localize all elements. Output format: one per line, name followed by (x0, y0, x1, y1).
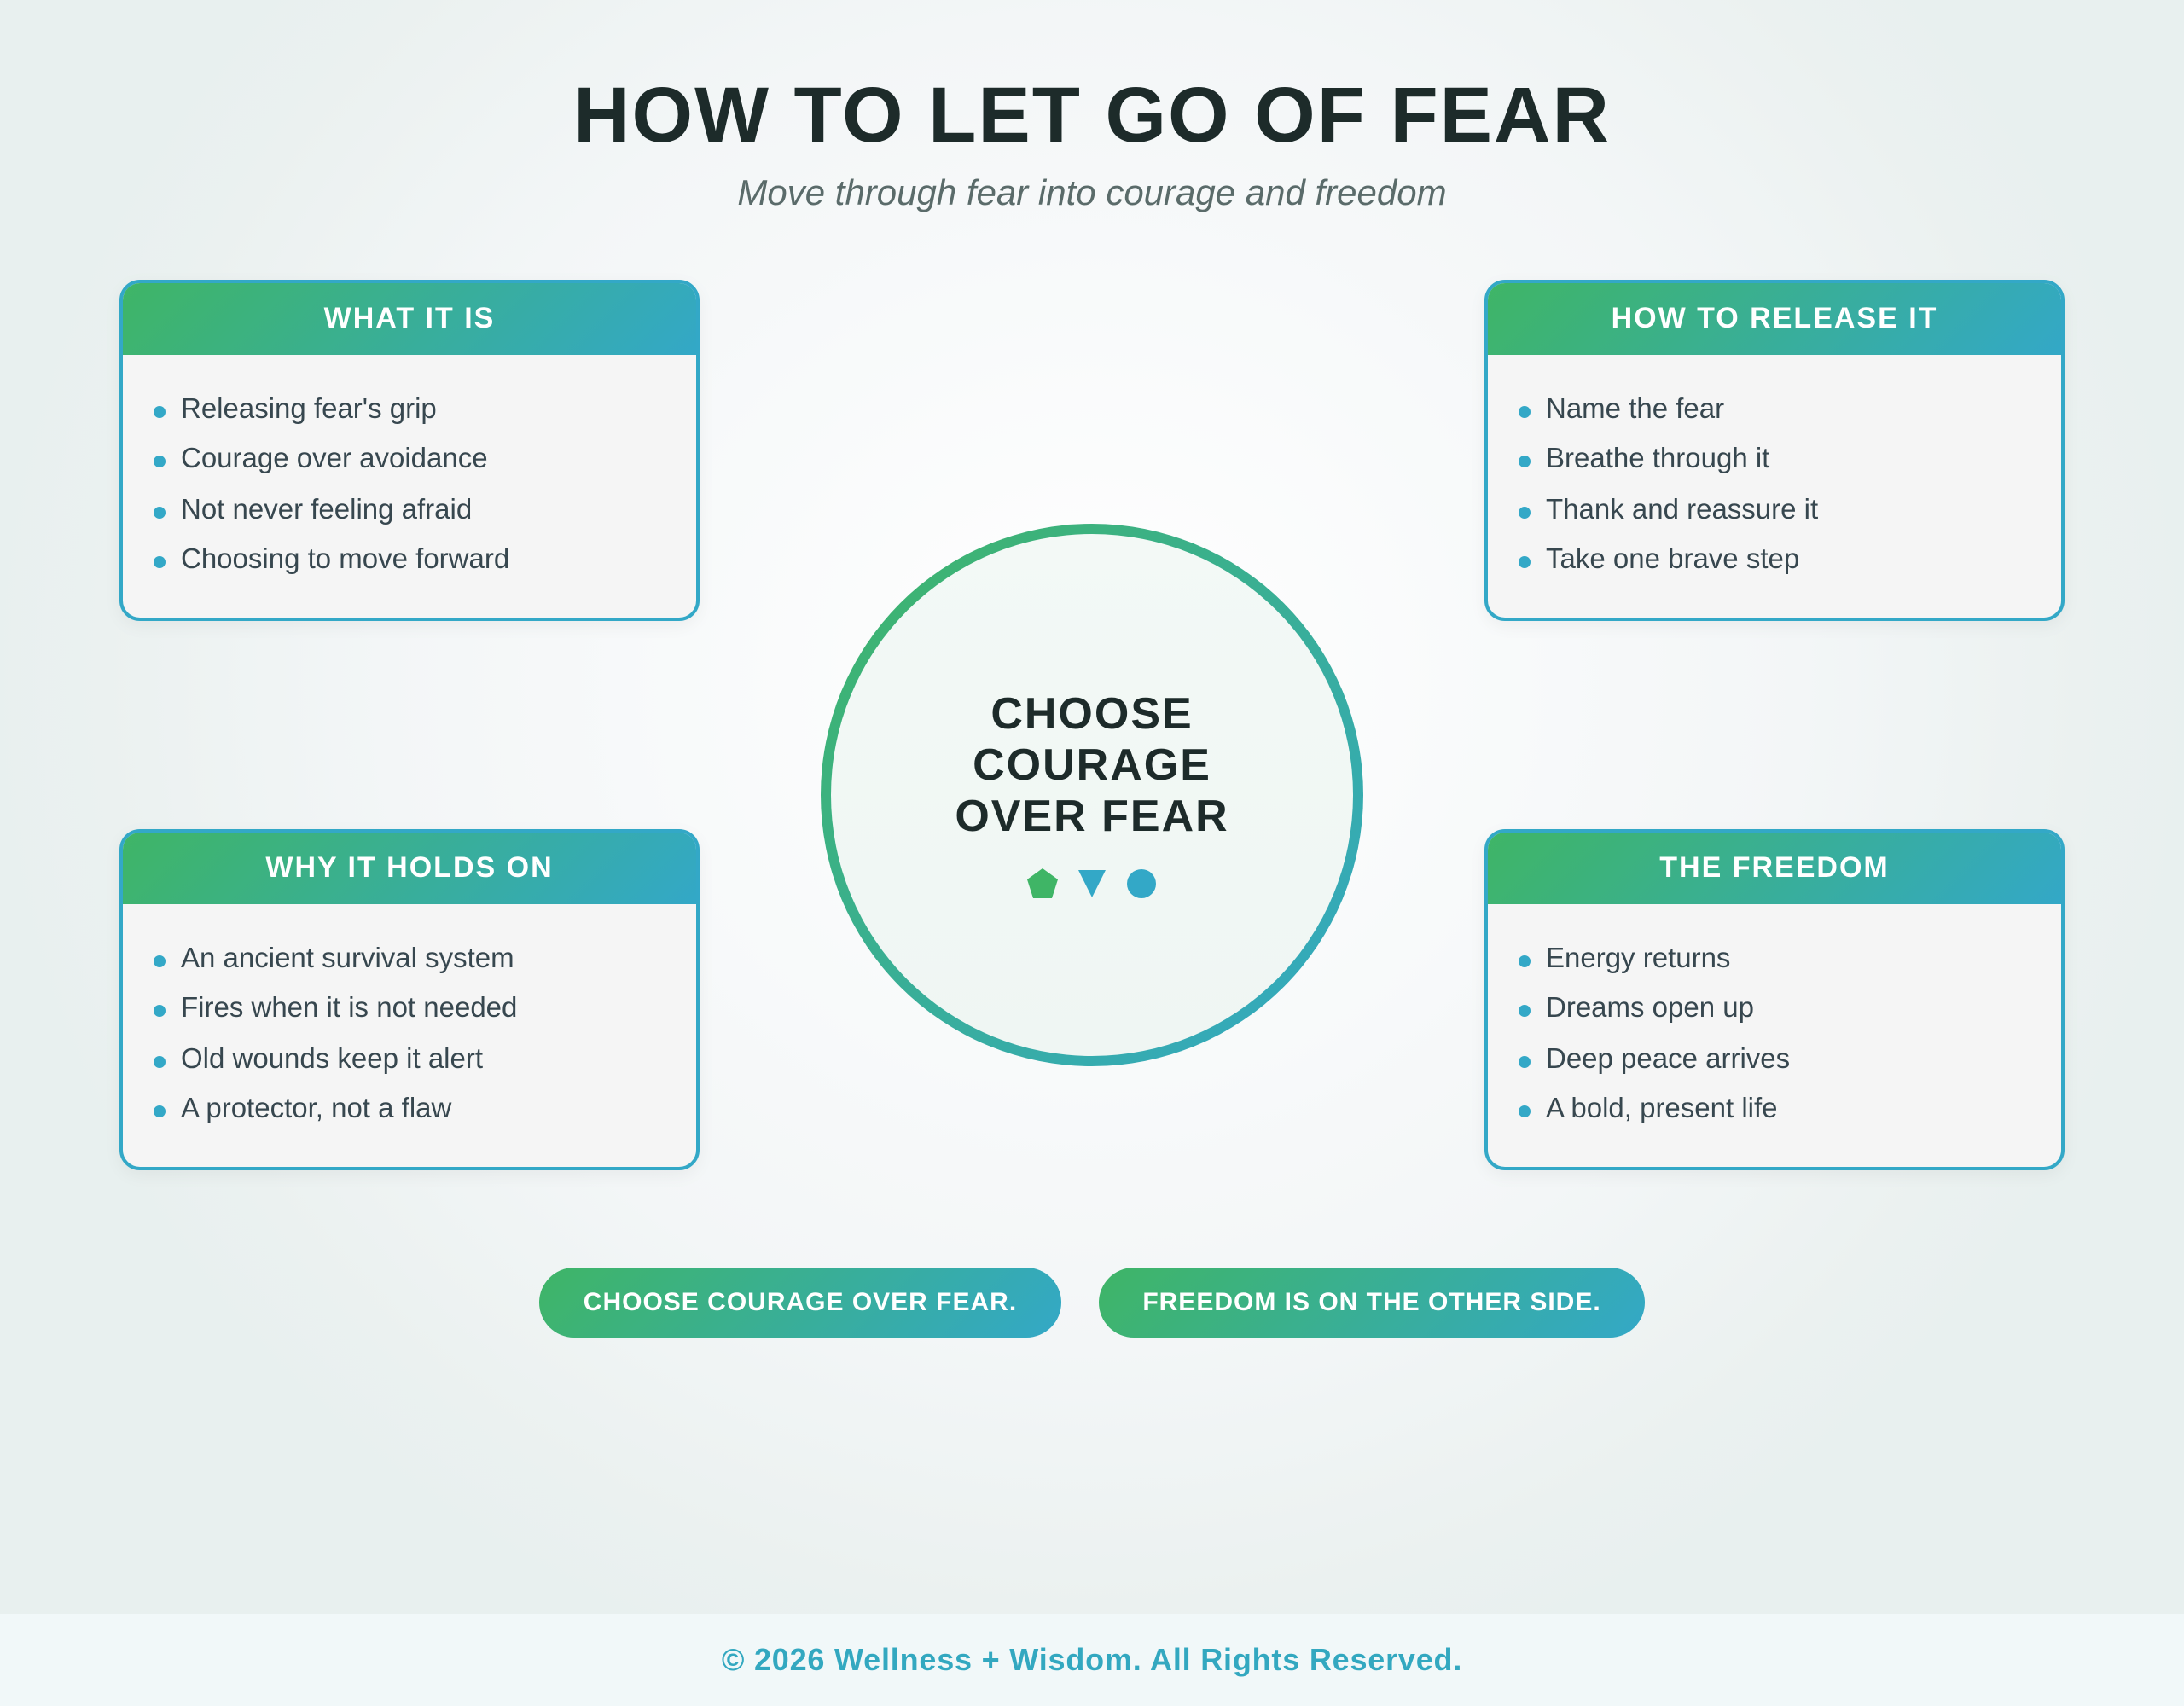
panel: what it is (119, 280, 700, 621)
central message: OVER FEAR (955, 792, 1229, 841)
list item: Releasing fear's grip (181, 392, 437, 424)
heading: what it is: WHAT IT IS (324, 302, 495, 334)
list item: An ancient survival system (181, 942, 514, 973)
list item: Deep peace arrives (1546, 1042, 1790, 1074)
central message (955, 689, 1229, 841)
list item: Take one brave step (1546, 543, 1799, 574)
panel: why it holds on (119, 829, 700, 1170)
heading: why it holds on: WHY IT HOLDS ON (265, 851, 554, 884)
footer: © 2026 Wellness + Wisdom. All Rights Reserved. (722, 1642, 1462, 1677)
subtitle: Move through fear into courage and freedom (737, 172, 1447, 212)
footer (0, 1614, 2184, 1706)
list item: Name the fear (1546, 392, 1724, 424)
list item: A bold, present life (1546, 1092, 1778, 1123)
icon row: pentagon, triangle, circle (1027, 868, 1156, 898)
heading: why it holds on (123, 833, 696, 904)
panel: how to release it (1484, 280, 2065, 621)
list item: Energy returns (1546, 942, 1730, 973)
list item: Not never feeling afraid (181, 493, 472, 525)
callout pill: choose courage (539, 1268, 1061, 1338)
list item: Dreams open up (1546, 991, 1754, 1023)
heading: how to release it: HOW TO RELEASE IT (1612, 302, 1937, 334)
panel: the freedom (1484, 829, 2065, 1170)
list item: Fires when it is not needed (181, 991, 517, 1023)
list item: Old wounds keep it alert (181, 1042, 483, 1074)
callout pill: choose courage: CHOOSE COURAGE OVER FEAR. (584, 1288, 1017, 1316)
list item: Courage over avoidance (181, 442, 488, 473)
heading: what it is (123, 283, 696, 355)
central message: CHOOSE (990, 689, 1194, 739)
heading: how to release it (1488, 283, 2061, 355)
central circle (821, 524, 1363, 1066)
list item: A protector, not a flaw (181, 1092, 451, 1123)
list item: Breathe through it (1546, 442, 1769, 473)
list item: Thank and reassure it (1546, 493, 1818, 525)
callout pill: freedom (1099, 1268, 1645, 1338)
callout pill: freedom: FREEDOM IS ON THE OTHER SIDE. (1142, 1288, 1601, 1316)
central message: COURAGE (973, 740, 1211, 790)
heading: the freedom (1488, 833, 2061, 904)
heading: the freedom: THE FREEDOM (1659, 851, 1890, 884)
list item: Choosing to move forward (181, 543, 509, 574)
title: HOW TO LET GO OF FEAR (573, 72, 1611, 159)
